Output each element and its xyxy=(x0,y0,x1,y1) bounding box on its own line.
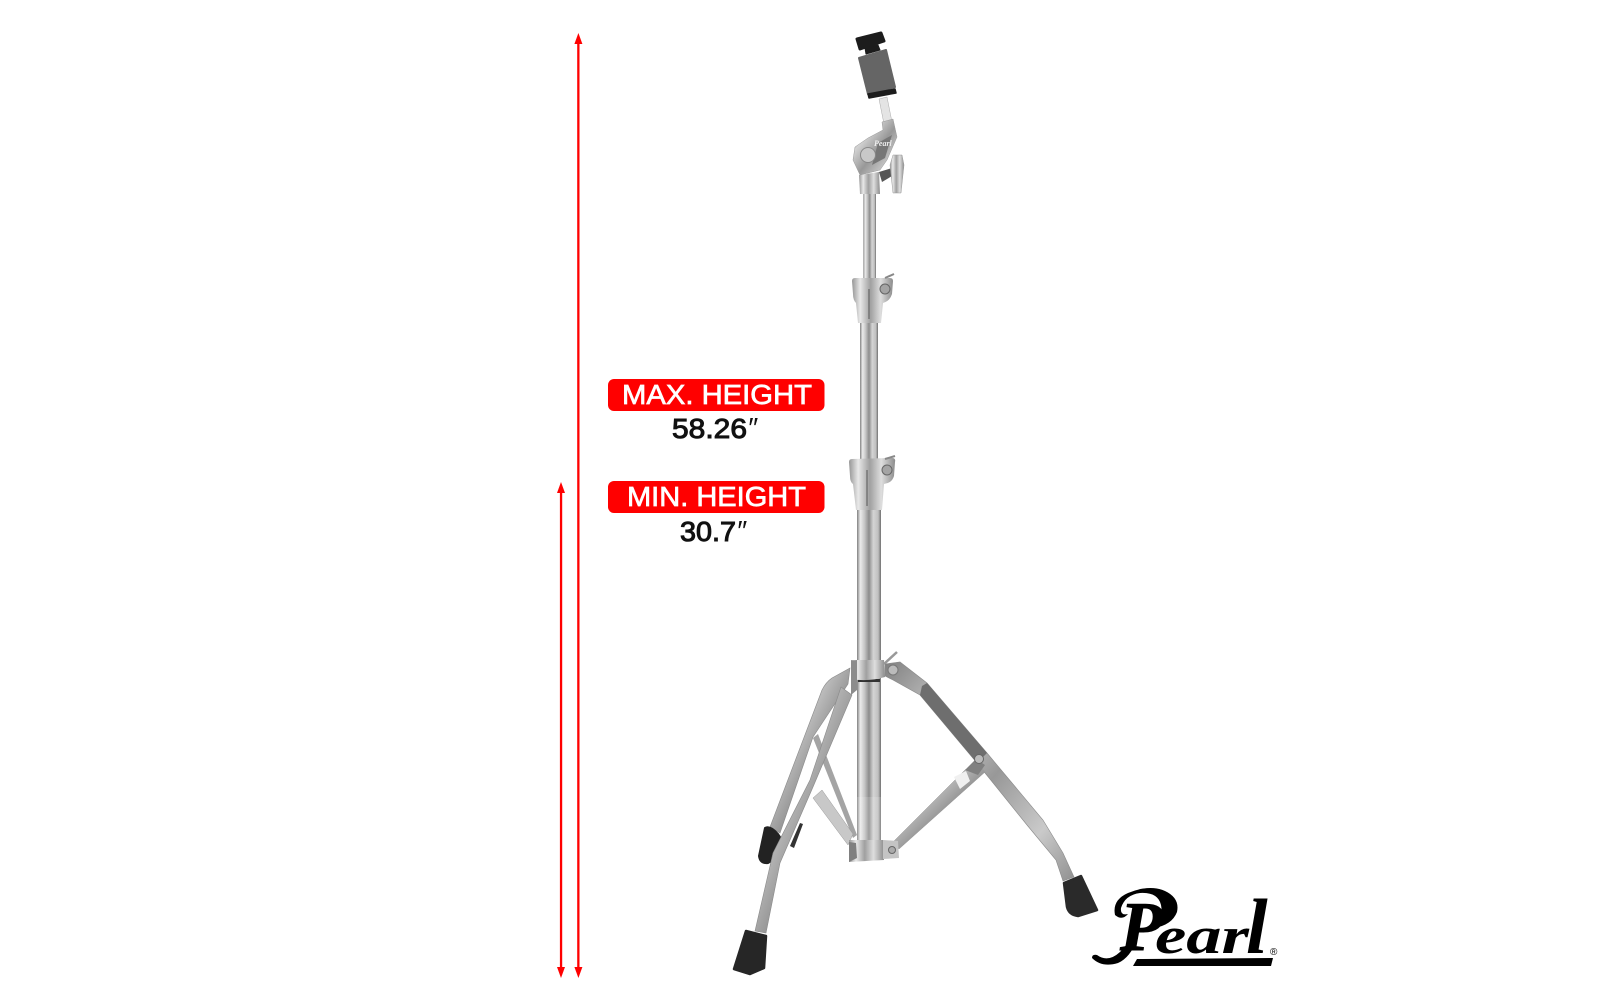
lower height clamp xyxy=(849,456,895,510)
logo: Pearl: P xyxy=(1119,889,1164,966)
logo: Pearl: ® xyxy=(1270,947,1278,958)
back left foot xyxy=(759,827,782,863)
tilter rod xyxy=(879,97,892,124)
label: max height: ″ xyxy=(747,412,758,443)
logo: Pearl: ear xyxy=(1155,908,1250,965)
lower rubber washer xyxy=(868,89,896,98)
middle tube xyxy=(860,318,878,462)
felt washer xyxy=(859,50,895,94)
right foot xyxy=(1064,876,1097,916)
wing nut top xyxy=(857,33,884,54)
base clamp xyxy=(851,652,897,695)
wing screw xyxy=(879,155,904,193)
collar under tilter xyxy=(859,172,880,194)
label: min height xyxy=(608,481,824,547)
label: max height xyxy=(608,379,824,444)
tilter body xyxy=(853,119,897,175)
right brace xyxy=(893,754,985,849)
upper thin tube xyxy=(863,190,876,282)
label: min height: 30.7 xyxy=(680,516,736,547)
back left leg xyxy=(770,668,850,833)
tilter body: Pearl xyxy=(874,139,893,148)
logo: Pearl xyxy=(1092,883,1278,970)
cymbal stand xyxy=(734,33,1097,974)
logo: Pearl: l xyxy=(1246,883,1268,970)
label: min height: MIN. HEIGHT xyxy=(627,481,806,512)
main tube xyxy=(857,505,881,842)
arrow: max height xyxy=(574,33,582,978)
base bottom bracket xyxy=(849,840,899,862)
label: max height: MAX. HEIGHT xyxy=(622,379,812,410)
rear braces xyxy=(813,734,857,845)
arrow: min height xyxy=(557,482,565,978)
front left foot xyxy=(734,931,766,974)
right leg xyxy=(885,662,1074,881)
label: max height: 58.26 xyxy=(672,413,747,444)
front left leg xyxy=(755,687,852,933)
label: min height: ″ xyxy=(736,515,747,546)
upper height clamp xyxy=(852,274,894,323)
